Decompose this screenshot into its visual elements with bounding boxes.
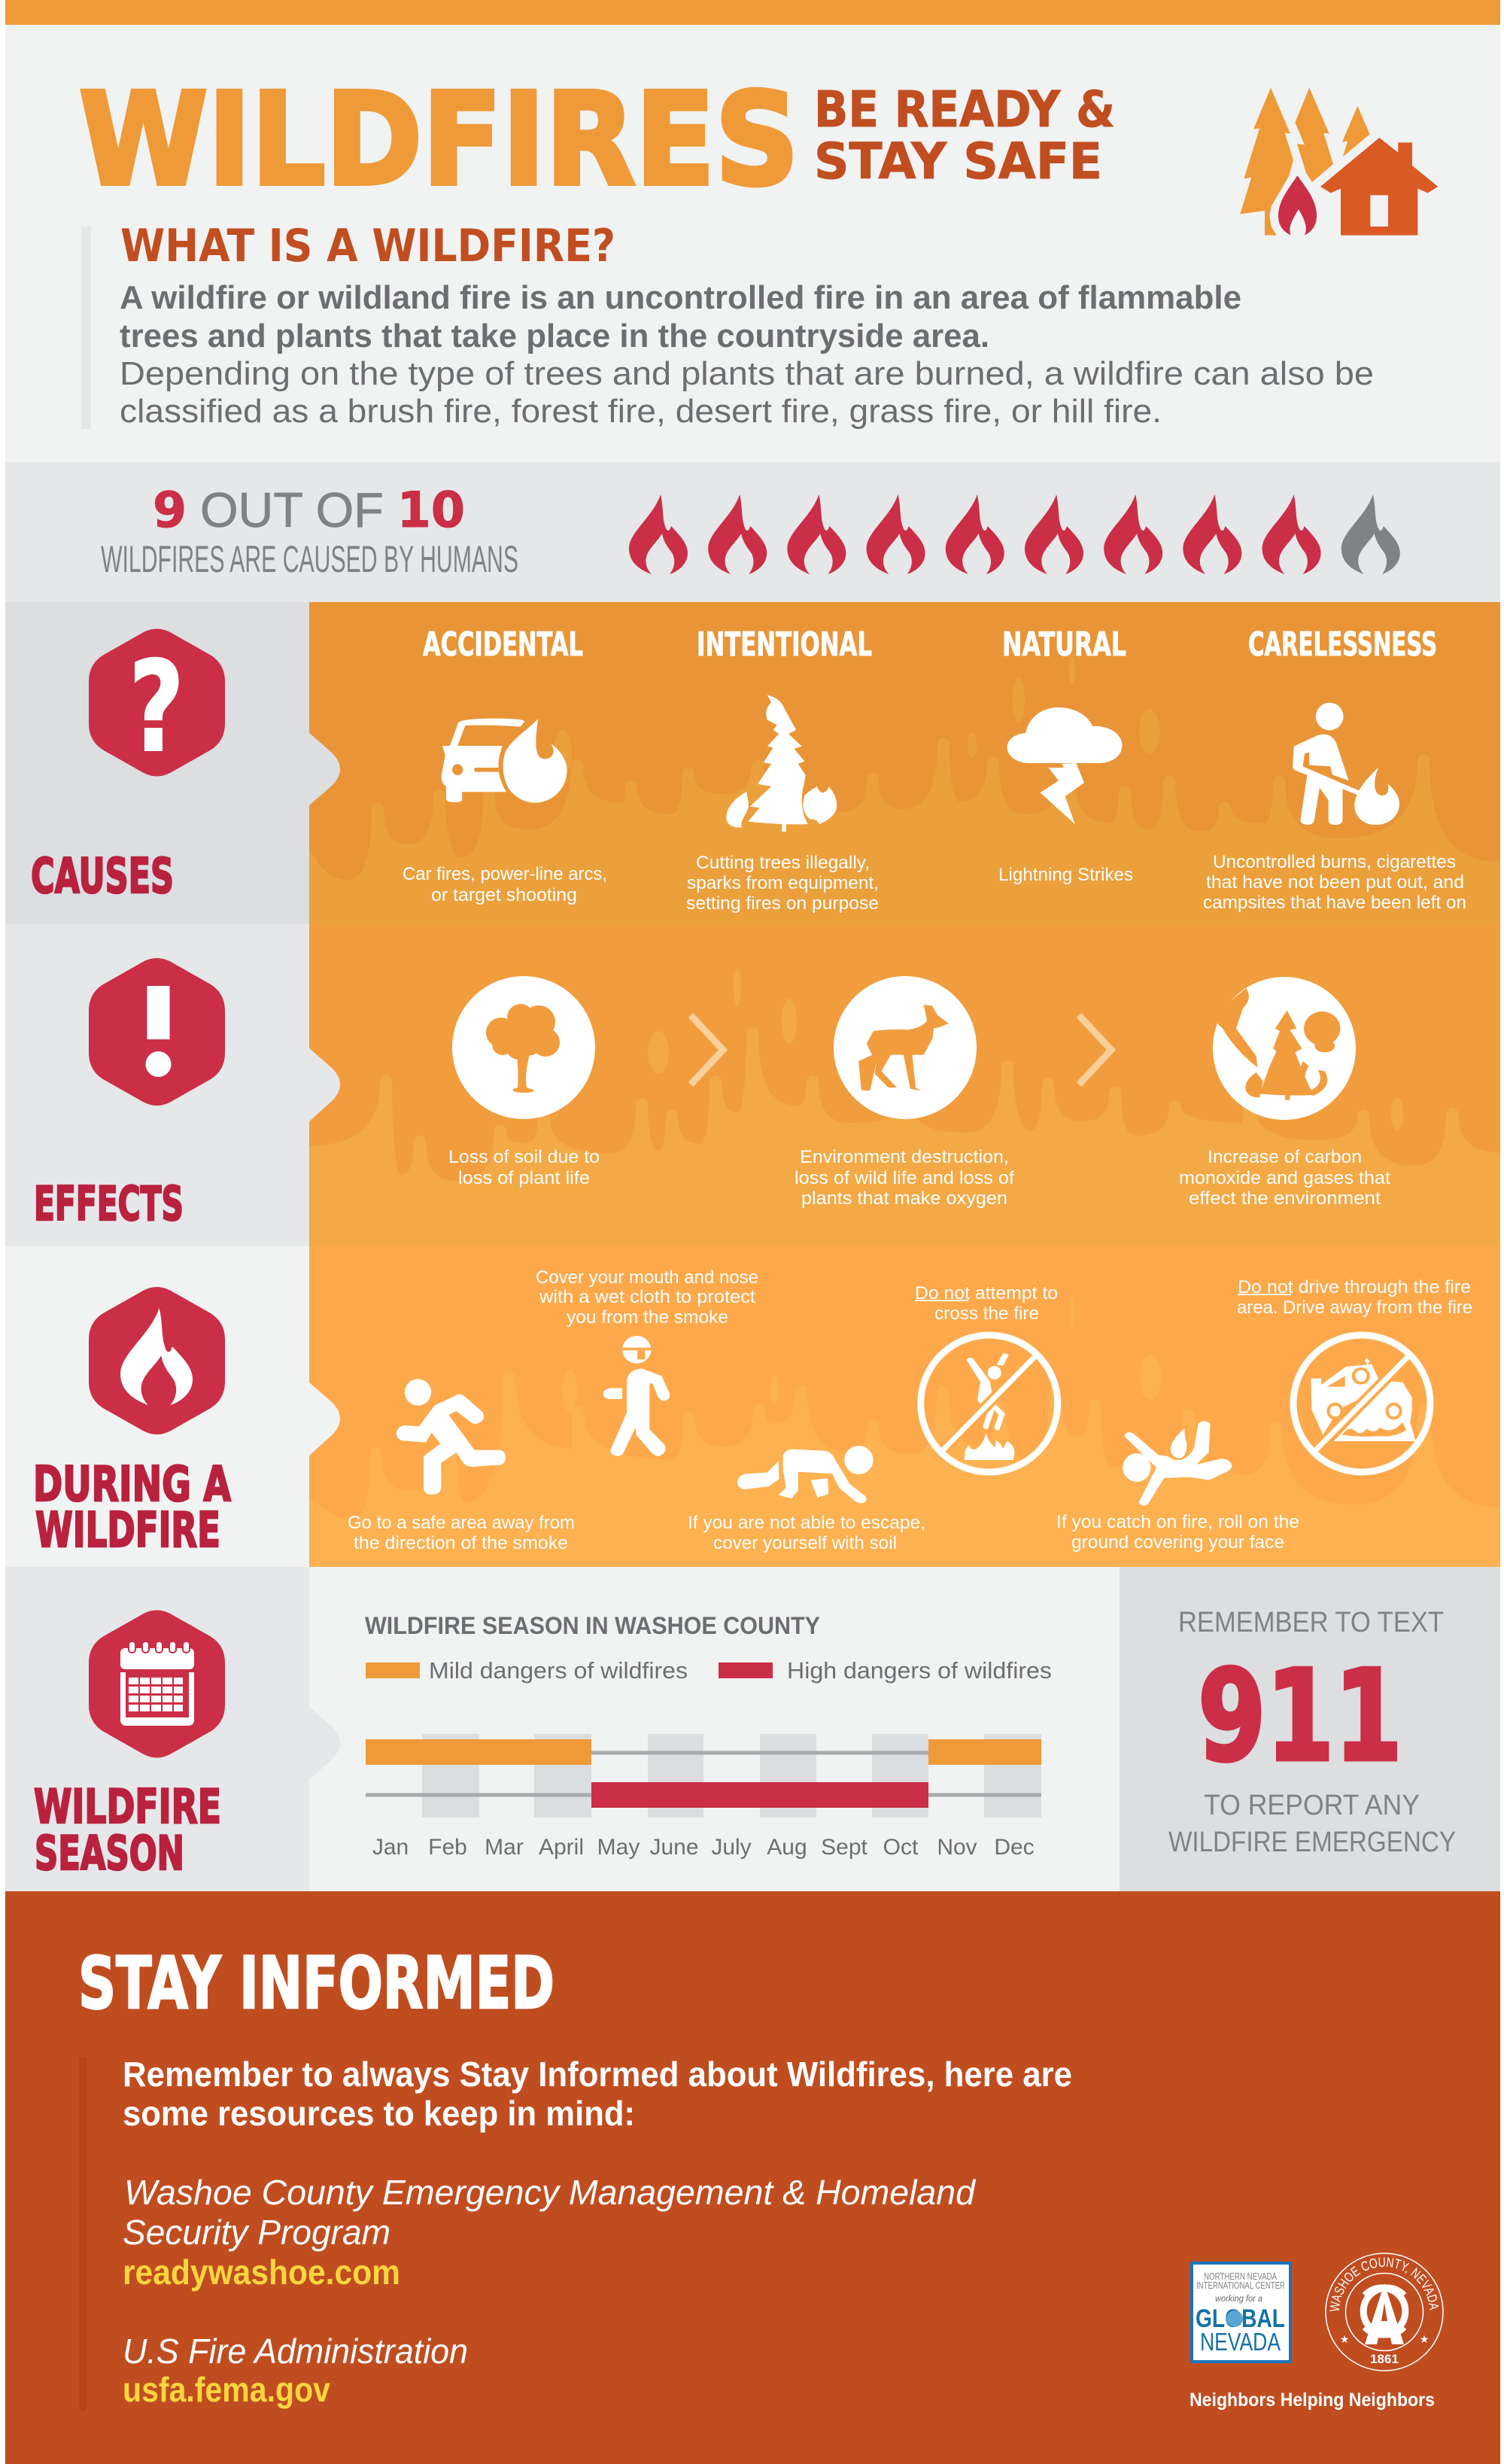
icon: deer [858,1005,949,1091]
logo: global nevada: NORTHERN NEVADA [1204,2271,1277,2282]
icon: burning car [442,719,567,803]
subtitle [814,81,1115,190]
tip: do not cross the fire: cross the fire [934,1303,1039,1324]
chart legend: Mild dangers of wildfires [429,1657,688,1684]
text: intro: some resources to keep in mind: [123,2094,635,2133]
column: intentional [686,625,879,914]
tip: cover yourself with soil: If you are not able to escape, [688,1513,925,1533]
resource: washoe county: Security Program [123,2213,390,2252]
panel: during a wildfire [5,1246,1504,1567]
tip: cover mouth and nose: you from the smoke [567,1307,728,1328]
decorative quote bar [81,227,91,429]
label: wildfire season [34,1779,221,1881]
arrow: chevron 2 [1079,1015,1111,1084]
chart: wildfire season by month: Aug [767,1835,807,1860]
top orange bar [5,0,1500,25]
text: definition: classified as a brush fire, forest fire, desert fire, grass fire, or hill fire. [120,393,1162,430]
column: intentional: Cutting trees illegally, [696,853,870,873]
text: definition: trees and plants that take place in the countryside area. [120,318,989,354]
tip: cover mouth and nose [536,1267,758,1456]
stat headline: 9 OUT OF 10 [153,482,465,539]
heading: stay informed: STAY INFORMED [78,1942,555,2025]
logo: washoe county seal: WASHOE COUNTY, NEVADA [1329,2258,1439,2311]
chart: wildfire season by month: July [711,1835,752,1860]
resource: us fire administration: U.S Fire Administration [123,2332,468,2371]
label: during a wildfire: DURING A [33,1457,231,1513]
chart: wildfire season by month: Nov [937,1835,977,1860]
logo: washoe county seal [1325,2253,1444,2371]
resource: washoe county [123,2173,976,2292]
icon: no driving through fire [1293,1335,1430,1472]
icon: burning tree [726,695,837,832]
effect: carbon monoxide: Increase of carbon [1208,1147,1362,1167]
label: wildfire season: SEASON [35,1826,184,1881]
icon: no crossing fire [921,1335,1058,1472]
label: wildfire season: WILDFIRE [34,1779,221,1834]
label: causes: CAUSES [31,849,174,905]
chart legend [366,1657,1052,1684]
tip: cover yourself with soil [688,1446,925,1553]
chart: wildfire season by month: Sept [821,1835,868,1860]
chart: wildfire season by month: Mar [485,1835,524,1860]
column: carelessness: campsites that have been left on [1203,893,1466,913]
text: intro: Remember to always Stay Informed about Wildfires, here are [123,2055,1072,2094]
resource: washoe county: Washoe County Emergency Management & Homeland [124,2173,976,2212]
logo: global nevada [1192,2263,1290,2362]
icon: burning tree and smoke [1213,988,1340,1100]
chart: wildfire season by month: Dec [994,1835,1035,1860]
tip: do not drive through the fire [1237,1277,1472,1472]
logo: washoe county seal: ★ [1420,2333,1429,2345]
tip: cover yourself with soil: cover yourself with soil [713,1533,897,1553]
tip: do not drive through the fire: area. Drive away from the fire [1237,1297,1472,1318]
icon: person shovelling fire [1293,703,1399,825]
tip: go to a safe area: Go to a safe area away from [348,1513,575,1533]
tip: roll on the ground: ground covering your face [1071,1532,1284,1553]
panel: remember to text 911: REMEMBER TO TEXT [1178,1607,1444,1638]
icon: flame hexagon [89,1287,225,1434]
column: accidental [403,625,607,905]
logo: washoe county seal: 1861 [1370,2352,1399,2366]
subtitle: STAY SAFE [814,132,1102,190]
logo: global nevada: INTERNATIONAL CENTER [1196,2280,1285,2291]
text: definition: A wildfire or wildland fire is an uncontrolled fire in an area of flammable [120,279,1241,316]
column: intentional: sparks from equipment, [687,873,879,893]
tip: roll on the ground: If you catch on fire, roll on the [1056,1512,1299,1532]
text: definition: Depending on the type of trees and plants that are burned, a wildfire can also be [120,355,1374,392]
logo: global nevada: GLOBAL [1196,2304,1285,2333]
label: during a wildfire: WILDFIRE [35,1503,220,1559]
label: effects: EFFECTS [34,1176,184,1231]
column: carelessness [1203,625,1466,913]
icon: storm cloud and lightning [1007,707,1122,824]
tip: cover mouth and nose: Cover your mouth and nose [536,1267,758,1288]
decorative quote bar [79,2058,87,2411]
subtitle: BE READY & [814,81,1115,138]
column: natural [998,625,1133,885]
icon: walking person with mask [603,1336,670,1456]
column: accidental: ACCIDENTAL [423,625,583,664]
panel: 9 out of 10 statistic [5,462,1500,602]
logo: washoe county seal: ★ [1340,2333,1349,2345]
column: carelessness: Uncontrolled burns, cigarettes [1213,852,1456,872]
column: carelessness: that have not been put out, and [1206,872,1464,893]
effect: carbon monoxide: monoxide and gases that [1179,1168,1390,1188]
chart heading: WILDFIRE SEASON IN WASHOE COUNTY [365,1612,820,1639]
panel: causes [5,602,1504,924]
column: natural: Lightning Strikes [998,865,1133,885]
icon: person rolling on fire [1123,1421,1232,1505]
chart: wildfire season by month: Oct [883,1835,919,1860]
panel: header [5,25,1500,462]
big number 911: 911 [1198,1644,1402,1790]
icon: crawling person [737,1446,874,1504]
resource: washoe county: readywashoe.com [123,2253,400,2292]
heading: what is a wildfire: WHAT IS A WILDFIRE? [120,220,615,272]
panel: effects [5,924,1504,1246]
effect: loss of soil [448,976,600,1188]
tip: do not cross the fire [915,1283,1058,1472]
panel: remember to text 911: TO REPORT ANY [1204,1790,1420,1821]
tip: go to a safe area: the direction of the smoke [354,1533,568,1553]
chart: wildfire season by month: Jan [372,1835,409,1860]
chart: wildfire season by month: May [597,1835,640,1860]
effect: environment destruction: plants that make oxygen [801,1188,1007,1209]
resource: us fire administration [123,2332,468,2409]
label: during a wildfire [33,1457,231,1559]
chart: wildfire season by month: June [649,1835,699,1860]
logo: global nevada: NEVADA [1200,2328,1281,2356]
icon row: ten flames [629,494,1400,574]
effect: carbon monoxide: effect the environment [1189,1188,1381,1209]
tip: roll on the ground [1056,1421,1299,1553]
arrow: chevron 1 [691,1015,723,1084]
column: intentional: setting fires on purpose [686,893,879,914]
icon: calendar hexagon [89,1611,225,1758]
text: definition [120,279,1374,430]
text: intro [123,2055,1072,2133]
icon: trees, flame and house [1240,88,1438,236]
tagline: Neighbors Helping Neighbors [1190,2389,1435,2411]
chart: wildfire season by month [366,1734,1041,1860]
stat caption: WILDFIRES ARE CAUSED BY HUMANS [101,538,518,580]
resource: us fire administration: usfa.fema.gov [123,2370,330,2409]
chart legend: High dangers of wildfires [787,1657,1052,1684]
icon: running person [397,1379,506,1495]
icon: exclamation hexagon [89,958,225,1106]
tip: do not drive through the fire: Do not drive through the fire [1238,1277,1471,1297]
icon: question mark hexagon: ? [129,635,184,780]
effect: carbon monoxide [1179,977,1390,1209]
title: wildfires: WILDFIRES [79,65,799,214]
chart: wildfire season by month: Feb [428,1835,467,1860]
column: accidental: or target shooting [431,885,577,905]
icon: tree [486,1004,560,1093]
panel: remember to text 911: WILDFIRE EMERGENCY [1168,1827,1456,1858]
chart: wildfire season by month: April [539,1835,584,1860]
tip: cover mouth and nose: with a wet cloth to protect [539,1287,755,1307]
effect: loss of soil: Loss of soil due to [448,1147,600,1167]
effect: loss of soil: loss of plant life [458,1168,590,1188]
icon: question mark hexagon [89,629,225,780]
panel: wildfire season [5,1567,1500,1891]
panel: stay informed [5,1891,1500,2464]
logo: global nevada: working for a [1215,2293,1262,2304]
column: intentional: INTENTIONAL [697,625,872,664]
effect: environment destruction: loss of wild life and loss of [795,1168,1014,1188]
column: natural: NATURAL [1002,625,1126,664]
panel: remember to text 911 [1120,1567,1500,1891]
tip: do not cross the fire: Do not attempt to [915,1283,1058,1303]
effect: environment destruction [795,976,1014,1209]
tip: go to a safe area [348,1379,575,1553]
column: accidental: Car fires, power-line arcs, [403,864,607,884]
effect: environment destruction: Environment destruction, [800,1147,1009,1167]
